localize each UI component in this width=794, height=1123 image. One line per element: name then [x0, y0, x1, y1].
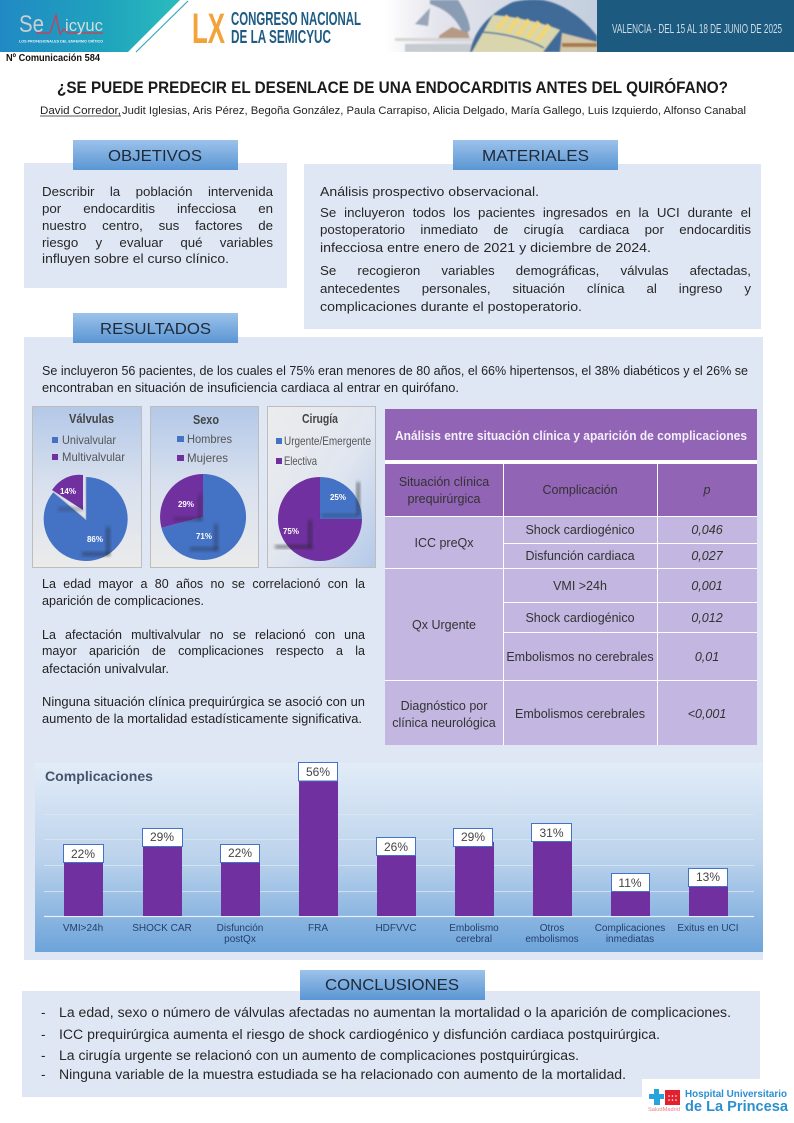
- panel: conclusiones: [22, 970, 760, 1097]
- category labels: cerebral: [456, 934, 492, 945]
- data labels: 22%: [71, 847, 95, 861]
- congress name: LX: [192, 5, 225, 53]
- logo: SEMICYUC: Se: [19, 11, 44, 38]
- text: conclusiones list: -: [41, 1048, 46, 1063]
- data labels: 29%: [461, 830, 485, 844]
- table row group: Qx Urgente: [412, 579, 723, 664]
- data labels: 29%: [150, 830, 174, 844]
- pie chart: válvulas: 14%: [60, 487, 76, 496]
- text: materiales: antecedentes personales, situación clínica al ingreso y: [320, 281, 751, 296]
- category labels: Exitus en UCI: [677, 923, 739, 934]
- table header row: Complicación: [542, 483, 618, 497]
- pie chart: válvulas: 86%: [87, 535, 103, 544]
- category labels: FRA: [308, 923, 328, 934]
- pie chart: cirugía: 25%: [330, 493, 346, 502]
- congress name: [192, 5, 361, 53]
- logo: SEMICYUC: [19, 11, 103, 44]
- category labels: postQx: [224, 934, 256, 945]
- text: resultados left column: aparición de complicaciones.: [42, 594, 204, 608]
- logo: Hospital Universitario de La Princesa: de La Princesa: [685, 1098, 789, 1115]
- text: materiales: infecciosa entre enero de 2021 y diciembre de 2024.: [320, 240, 651, 255]
- table row group: Qx Urgente: Embolismos no cerebrales: [506, 650, 654, 664]
- table row group: Qx Urgente: Qx Urgente: [412, 618, 476, 632]
- text: resultados left column: [42, 576, 365, 726]
- pie chart: sexo: [150, 406, 258, 568]
- category labels: VMI>24h: [63, 923, 103, 934]
- pie chart: sexo: 71%: [196, 532, 212, 541]
- table row group: Diagnóstico: Diagnóstico por: [401, 699, 487, 713]
- text: conclusiones list: -: [41, 1067, 46, 1082]
- text: resultados left column: La afectación multivalvular no se relacionó con una: [42, 628, 365, 642]
- logo: SEMICYUC: LOS PROFESIONALES DEL ENFERMO CRÍTICO: [19, 38, 103, 44]
- pie chart: válvulas: [32, 406, 142, 568]
- table row group: ICC preQx: [414, 523, 724, 563]
- text: conclusiones list: -: [41, 1027, 46, 1042]
- logo: Hospital Universitario de La Princesa: Hospital Universitario: [685, 1088, 787, 1100]
- text: objetivos: nuestro centro, sus factores de: [42, 218, 273, 233]
- text: conclusiones list: [41, 1005, 731, 1082]
- bar chart: complicaciones: [35, 762, 763, 952]
- logo: Hospital Universitario de La Princesa: [642, 1079, 794, 1123]
- text: materiales: postoperatorio inmediato de cirugía cardiaca por endocarditis: [320, 222, 751, 237]
- banner photo: Ciudad de las Artes: [385, 0, 597, 52]
- table row group: Diagnóstico: clínica neurológica: [392, 716, 496, 730]
- text: conclusiones list: La cirugía urgente se relacionó con un aumento de complicaciones postquirúrgicas.: [59, 1048, 579, 1063]
- table row group: Qx Urgente: Shock cardiogénico: [525, 611, 635, 625]
- authors: David Corredor,: [40, 105, 121, 117]
- table row group: ICC preQx: ICC preQx: [414, 536, 474, 550]
- pie chart: cirugía: Electiva: [284, 454, 317, 468]
- table header row: Situación clínica: [399, 475, 489, 489]
- text: materiales: Se incluyeron todos los pacientes ingresados en la UCI durante el: [320, 205, 751, 220]
- category labels: Complicaciones: [595, 923, 665, 934]
- text: resultados intro: encontraban en situación de insuficiencia cardiaca al entrar en quirófano.: [42, 381, 459, 395]
- congress name: DE LA SEMICYUC: [231, 27, 331, 47]
- text: objetivos: influyen sobre el curso clínico.: [42, 251, 229, 266]
- banner: [0, 0, 794, 53]
- date band: [597, 0, 794, 52]
- pie chart: cirugía: Urgente/Emergente: [284, 434, 371, 448]
- text: conclusiones list: ICC prequirúrgica aumenta el riesgo de shock cardiogénico y disfunción cardiaca postquirúrgica.: [59, 1027, 660, 1042]
- table header row: [385, 464, 757, 516]
- heading: objetivos: OBJETIVOS: [108, 148, 202, 165]
- category labels: Disfunción: [217, 923, 263, 934]
- category labels: SHOCK CAR: [132, 923, 192, 934]
- pie chart: cirugía: 75%: [283, 527, 299, 536]
- data labels: 11%: [618, 876, 642, 890]
- text: objetivos: riesgo y evaluar qué variables: [42, 235, 273, 250]
- panel: objetivos: [24, 140, 287, 288]
- table row group: ICC preQx: Disfunción cardiaca: [525, 549, 635, 563]
- banner: teal logo band: [0, 0, 180, 52]
- category labels: [63, 923, 739, 945]
- table row group: ICC preQx: Shock cardiogénico: [525, 523, 635, 537]
- text: conclusiones list: La edad, sexo o número de válvulas afectadas no aumentan la mortalidad o la aparición de complicaciones.: [59, 1005, 731, 1020]
- data labels: 22%: [228, 846, 252, 860]
- table row group: Qx Urgente: 0,001: [691, 579, 723, 593]
- data labels: 26%: [384, 840, 408, 854]
- text: objetivos: [42, 183, 273, 266]
- text: materiales: [320, 184, 751, 314]
- communication number: Nº Comunicación 584: [6, 53, 100, 64]
- text: resultados left column: Ninguna situación clínica prequirúrgica se asoció con un: [42, 695, 365, 709]
- heading: materiales: MATERIALES: [482, 148, 589, 165]
- table row group: Diagnóstico: Embolismos cerebrales: [515, 707, 645, 721]
- text: resultados left column: La edad mayor a 80 años no se correlacionó con la: [42, 577, 365, 591]
- text: materiales: Se recogieron variables demográficas, válvulas afectadas,: [320, 263, 751, 278]
- pie chart: válvulas: Multivalvular: [62, 450, 125, 464]
- table header row: p: [703, 483, 711, 497]
- text: conclusiones list: Ninguna variable de la muestra estudiada se ha relacionado con aumento de la mortalidad.: [59, 1067, 626, 1082]
- table row group: ICC preQx: 0,027: [691, 549, 724, 563]
- text: resultados intro: [42, 364, 748, 395]
- category labels: Otros: [540, 923, 564, 934]
- category labels: Embolismo: [449, 923, 499, 934]
- table row group: Qx Urgente: VMI >24h: [553, 579, 607, 593]
- category labels: inmediatas: [606, 934, 654, 945]
- pie chart: cirugía: [268, 406, 376, 568]
- title: ¿SE PUEDE PREDECIR EL DESENLACE DE UNA ENDOCARDITIS ANTES DEL QUIRÓFANO?: [57, 78, 728, 97]
- heading: resultados: [73, 313, 238, 343]
- text: objetivos: por endocarditis infecciosa en: [42, 201, 273, 216]
- heading: objetivos: [73, 140, 238, 170]
- text: resultados left column: aumento de la mortalidad estadísticamente significativa.: [42, 712, 362, 726]
- table row group: Qx Urgente: 0,01: [695, 650, 719, 664]
- pie chart: sexo: Sexo: [193, 413, 219, 427]
- table title: Análisis entre situación clínica y aparición de complicaciones: [395, 429, 747, 443]
- category labels: embolismos: [525, 934, 579, 945]
- authors: Judit Iglesias, Aris Pérez, Begoña González, Paula Carrapiso, Alicia Delgado, María Gallego, Luis Izquierdo, Alfonso Canabal: [122, 105, 746, 117]
- data labels: 56%: [306, 765, 330, 779]
- pie chart: válvulas: Válvulas: [69, 412, 114, 426]
- panel: resultados: [24, 313, 763, 960]
- pie chart: sexo: 29%: [178, 500, 194, 509]
- pie chart: cirugía: Cirugía: [302, 412, 339, 426]
- heading: conclusiones: [300, 970, 485, 1000]
- heading: resultados: RESULTADOS: [100, 321, 211, 338]
- table row group: Qx Urgente: 0,012: [691, 611, 723, 625]
- category labels: HDFVVC: [375, 923, 417, 934]
- congress name: CONGRESO NACIONAL: [231, 9, 361, 29]
- logo: Hospital Universitario de La Princesa: SaludMadrid: [648, 1107, 680, 1113]
- table title: [385, 409, 757, 460]
- text: materiales: complicaciones durante el postoperatorio.: [320, 299, 582, 314]
- pie chart: sexo: Hombres: [187, 432, 232, 446]
- panel: materiales: [304, 140, 761, 329]
- table row group: ICC preQx: 0,046: [691, 523, 723, 537]
- text: objetivos: Describir la población intervenida: [42, 184, 273, 199]
- logo: SEMICYUC: icyuc: [65, 16, 103, 35]
- table row group: Diagnóstico: <0,001: [688, 707, 726, 721]
- data labels: 13%: [696, 870, 720, 884]
- text: resultados intro: Se incluyeron 56 pacientes, de los cuales el 75% eran menores de 80 años, el 66% hipertensos, el 38% diabéticos y el 26% se: [42, 364, 748, 378]
- text: resultados left column: mayor aparición de complicaciones respecto a la: [42, 644, 365, 658]
- text: conclusiones list: -: [41, 1005, 46, 1020]
- heading: materiales: [453, 140, 618, 170]
- data labels: [64, 762, 728, 892]
- data labels: 31%: [539, 826, 564, 840]
- pie chart: sexo: Mujeres: [187, 451, 228, 465]
- text: resultados left column: afectación univalvular.: [42, 662, 169, 676]
- table: situación clínica y complicaciones: [385, 409, 757, 745]
- chart title: Complicaciones: [45, 769, 153, 784]
- table header row: prequirúrgica: [408, 492, 481, 506]
- heading: conclusiones: CONCLUSIONES: [325, 977, 459, 994]
- text: materiales: Análisis prospectivo observacional.: [320, 184, 539, 199]
- bars: [64, 781, 728, 916]
- pie chart: válvulas: Univalvular: [62, 433, 116, 447]
- table row group: Diagnóstico: [392, 699, 726, 730]
